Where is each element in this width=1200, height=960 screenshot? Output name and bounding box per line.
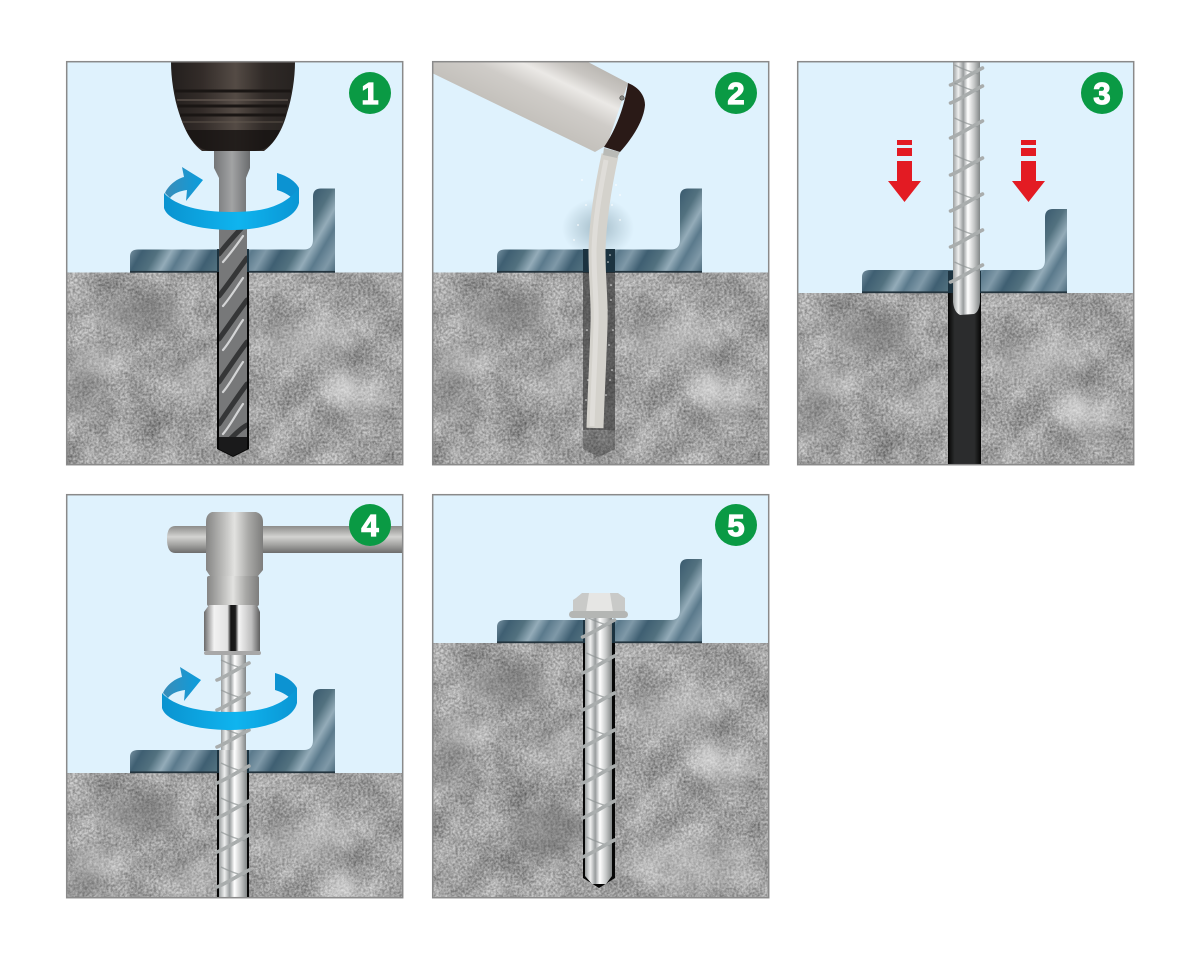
screw <box>582 617 614 884</box>
drill bit flutes <box>219 222 247 450</box>
hole <box>583 620 615 888</box>
panel: step 1 drill hole <box>66 62 403 465</box>
bracket plate <box>130 689 335 773</box>
panel: step 4 tighten screw <box>66 495 403 898</box>
bracket plate <box>497 559 702 643</box>
bracket plate <box>130 188 335 273</box>
hex bolt head <box>569 593 628 618</box>
drill chuck <box>171 62 295 151</box>
number badge 4 <box>349 504 391 546</box>
screw <box>217 652 249 898</box>
number badge 5: 5 <box>727 508 745 543</box>
number badge 2: 2 <box>727 76 745 111</box>
panel: step 3 insert screw <box>798 62 1134 465</box>
drill shank <box>214 151 250 212</box>
bracket plate <box>862 209 1067 293</box>
rotation arrow <box>164 167 299 230</box>
red arrow right <box>1012 140 1045 202</box>
hole with dust <box>583 249 615 457</box>
drill tip <box>219 437 247 456</box>
rotation arrow <box>162 667 297 730</box>
air stream <box>592 155 610 428</box>
concrete block <box>66 773 403 898</box>
panel: step 5 finished fixing <box>432 495 769 898</box>
number badge 1 <box>349 72 391 114</box>
panel: step 2 blow out hole <box>432 62 769 465</box>
number badge 2 <box>715 72 757 114</box>
dust cloud <box>567 203 629 250</box>
red arrow left <box>888 140 921 202</box>
hole filled <box>948 271 981 465</box>
T-handle bar <box>167 526 403 553</box>
screw <box>950 62 982 315</box>
number badge 3 <box>1081 72 1123 114</box>
hole <box>217 750 249 898</box>
number badge 3: 3 <box>1093 76 1111 111</box>
concrete block <box>432 643 769 898</box>
dust specks <box>573 169 621 401</box>
wrench head <box>206 512 263 576</box>
number badge 5 <box>715 504 757 546</box>
concrete block <box>432 272 769 465</box>
bracket plate <box>497 188 702 273</box>
wrench collar <box>207 576 259 606</box>
concrete block <box>66 272 403 465</box>
number badge 4: 4 <box>361 508 379 543</box>
number badge 1: 1 <box>361 76 379 111</box>
blower tube <box>432 62 645 158</box>
drilled hole <box>217 249 249 457</box>
concrete block <box>798 293 1134 465</box>
wrench socket <box>204 605 261 655</box>
